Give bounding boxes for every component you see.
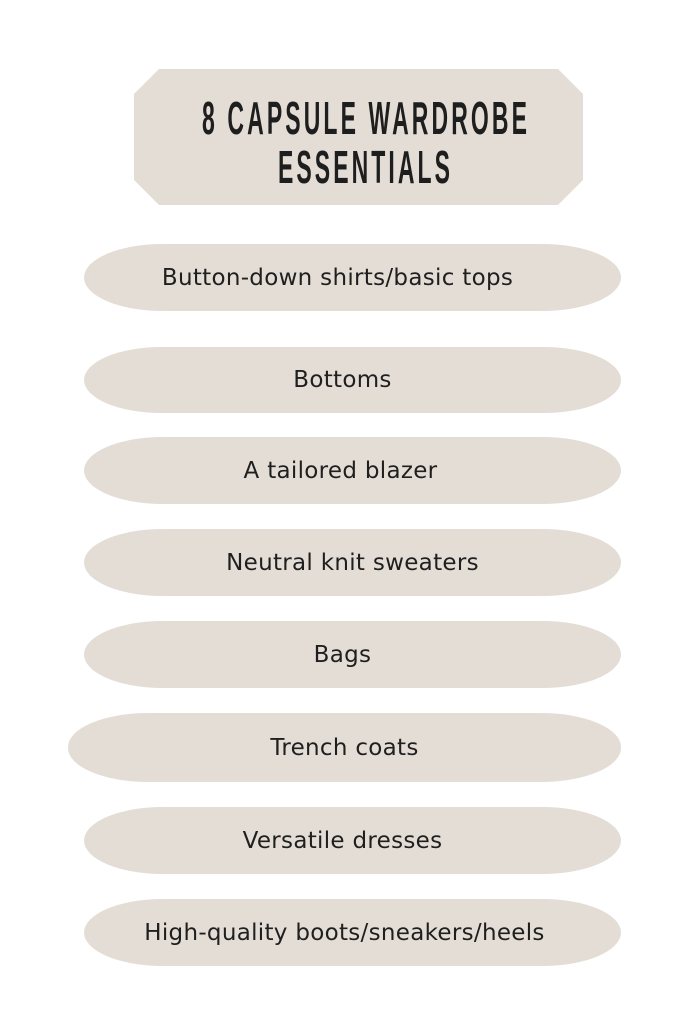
pill: button-down shirts bbox=[84, 244, 621, 311]
pill: trench coats bbox=[68, 713, 621, 782]
pill: bottoms: Bottoms bbox=[293, 367, 392, 393]
title: 8 CAPSULE WARDROBE bbox=[202, 92, 527, 144]
pill: dresses: Versatile dresses bbox=[243, 828, 442, 854]
pill: blazer: A tailored blazer bbox=[244, 458, 437, 484]
pill: bags: Bags bbox=[314, 642, 371, 668]
title plate bbox=[134, 69, 583, 205]
pill: dresses bbox=[84, 807, 621, 874]
pill: bottoms bbox=[84, 347, 621, 413]
pill: button-down shirts: Button-down shirts/basic tops bbox=[162, 264, 513, 290]
pill: bags bbox=[84, 621, 621, 688]
pill: footwear bbox=[84, 899, 621, 966]
pill: blazer bbox=[84, 437, 621, 504]
pill: sweaters: Neutral knit sweaters bbox=[226, 550, 479, 576]
title: ESSENTIALS bbox=[278, 141, 450, 193]
title bbox=[202, 92, 527, 193]
pill: footwear: High-quality boots/sneakers/heels bbox=[144, 920, 545, 946]
pill: trench coats: Trench coats bbox=[270, 734, 419, 760]
pill: sweaters bbox=[84, 529, 621, 596]
